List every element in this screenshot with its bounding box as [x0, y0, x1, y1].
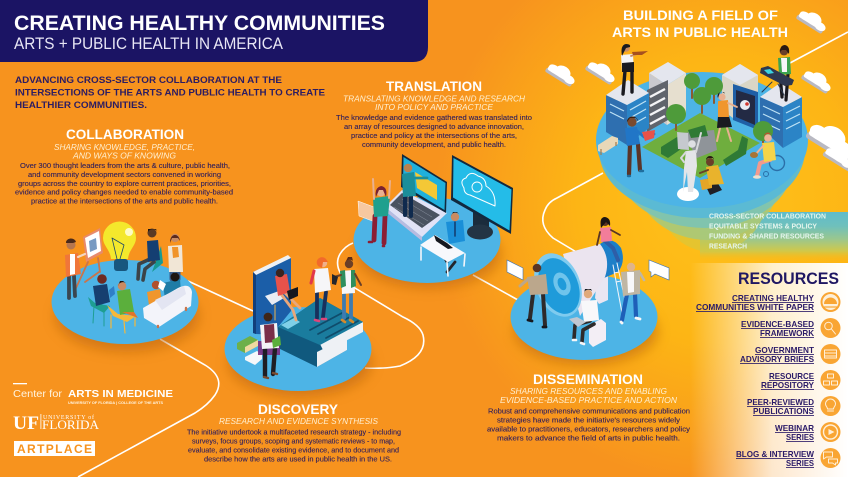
logo: university of florida: FLORIDA — [42, 418, 99, 432]
megaphone — [525, 240, 623, 324]
person: standing woman — [168, 234, 183, 279]
text block: discovery: describe how the arts are used in public health in the US. — [204, 454, 392, 464]
person: seated reader — [265, 269, 300, 320]
text block: dissemination: available to practitioners, educators, researchers and policy — [487, 424, 690, 434]
text block: discovery: surveys, focus groups, scoping and systematic reviews - to map, — [192, 436, 395, 446]
text block: translation: TRANSLATION — [386, 78, 482, 94]
person: standing on laptop — [402, 164, 427, 216]
heading: building a field: ARTS IN PUBLIC HEALTH — [612, 24, 788, 40]
text block: dissemination: DISSEMINATION — [533, 371, 643, 387]
book stacks — [237, 336, 280, 365]
intro statement: HEALTHIER COMMUNITIES. — [15, 100, 147, 111]
text block: discovery: evaluate, and consolidate existing evidence, and to document and — [188, 446, 399, 454]
funnel beneath the field platform — [599, 82, 805, 252]
person: seated group on chairs — [88, 274, 138, 333]
text block: collaboration: evidence and policy changes needed to enable community-based — [15, 188, 233, 196]
background glow — [380, 0, 848, 477]
teal strip behind field pillars — [700, 212, 848, 262]
list: resource links: COMMUNITIES WHITE PAPER — [696, 302, 814, 312]
person: orange hair — [311, 257, 331, 321]
logo: center for arts in medicine: UNIVERSITY OF FLORIDA | COLLEGE OF THE ARTS — [68, 401, 164, 405]
text block: dissemination — [487, 371, 690, 442]
list: resource links: SERIES — [786, 432, 814, 442]
intro statement: INTERSECTIONS OF THE ARTS AND PUBLIC HEALTH TO CREATE — [15, 88, 325, 98]
lawn — [642, 113, 760, 178]
logo: university of florida — [13, 413, 99, 434]
statue — [677, 132, 701, 201]
text block: translation: The knowledge and evidence gathered was translated into — [336, 113, 532, 122]
person: man on right — [621, 263, 644, 323]
list: resource links: EVIDENCE-BASED — [741, 319, 814, 329]
list: resource links: REPOSITORY — [761, 380, 814, 390]
text block: collaboration: practice at the intersections of the arts and public health. — [31, 196, 218, 206]
logo: center for arts in medicine: Center for — [13, 388, 63, 400]
list: resource links: PUBLICATIONS — [753, 406, 814, 416]
logo: university of florida: UF — [13, 413, 39, 434]
icon: webinar play — [820, 422, 840, 442]
monitor — [451, 155, 513, 240]
icon: white paper — [820, 292, 840, 312]
cloud 1 — [545, 59, 579, 88]
logo: artplace: ARTPLACE — [17, 442, 92, 456]
text block: collaboration: COLLABORATION — [66, 126, 184, 142]
horizontal books — [278, 298, 363, 367]
person: woman with book — [625, 116, 655, 176]
text block: dissemination: SHARING RESOURCES AND ENABLING — [510, 387, 667, 396]
person: woman with arms raised — [369, 179, 390, 246]
cloud 2 — [585, 57, 619, 86]
list: field pillars: RESEARCH — [709, 242, 747, 250]
text block: dissemination: strategies have made the initiative's resources widely — [497, 416, 680, 424]
trees — [666, 73, 773, 146]
icon: speech blog — [820, 448, 840, 468]
icon: repository — [820, 370, 840, 390]
list: resource links: PEER-REVIEWED — [747, 397, 814, 407]
text block: discovery: DISCOVERY — [258, 401, 339, 417]
intro statement — [15, 75, 325, 111]
person: seated man — [138, 228, 163, 280]
illustration: translation platform — [354, 154, 513, 288]
heading: building a field: BUILDING A FIELD OF — [623, 7, 778, 23]
desk with seated man — [420, 212, 465, 276]
text block: collaboration: Over 300 thought leaders from the arts & culture, public health, — [20, 161, 230, 170]
list: resource links: GOVERNMENT — [755, 345, 814, 355]
text block: collaboration: groups across the country to explore current practices, priorities, — [18, 179, 231, 188]
person: keyboard player — [760, 45, 794, 100]
resources panel background — [690, 263, 848, 477]
bench — [598, 136, 618, 155]
person: presenter — [65, 238, 85, 298]
list: resource links: RESOURCE — [769, 371, 814, 381]
person: woman at mural — [717, 92, 737, 141]
person: green vest — [332, 257, 361, 322]
person: violinist — [621, 44, 648, 94]
list: resource links: WEBINAR — [775, 423, 814, 433]
text block: translation: community development, and public health. — [362, 140, 506, 149]
cloud 4 — [801, 66, 835, 95]
list: resource links: ADVISORY BRIEFS — [740, 354, 814, 364]
ladder — [613, 263, 625, 313]
heading: resources: RESOURCES — [738, 269, 839, 288]
laptop — [385, 154, 447, 241]
list: field pillars: CROSS-SECTOR COLLABORATION — [709, 212, 826, 220]
text block: dissemination: Robust and comprehensive communications and publication — [488, 406, 690, 416]
cloud 5 — [805, 116, 848, 163]
text block: translation: practice and policy at the intersections of the arts, — [351, 131, 517, 140]
heading: building a field — [612, 7, 788, 40]
list: field pillars: EQUITABLE SYSTEMS & POLICY — [709, 222, 817, 230]
text block: translation: TRANSLATING KNOWLEDGE AND RESEARCH — [343, 94, 525, 104]
clouds — [545, 6, 848, 173]
text block: dissemination: makers to advance the field of arts in public health. — [497, 434, 680, 442]
buildings — [606, 62, 802, 148]
speech bubbles — [507, 260, 669, 280]
text block: discovery: RESEARCH AND EVIDENCE SYNTHESIS — [219, 417, 379, 426]
title banner — [0, 0, 428, 62]
title: CREATING HEALTHY COMMUNITIES — [14, 12, 385, 35]
text block: dissemination: EVIDENCE-BASED PRACTICE AND ACTION — [500, 396, 677, 405]
person: wheelchair user — [750, 132, 784, 179]
text block: collaboration: and community development sectors convened in working — [28, 170, 221, 179]
icon: magnifier — [820, 318, 840, 338]
illustration: collaboration platform — [52, 221, 199, 352]
list: resource links — [696, 293, 814, 468]
person: woman sitting on megaphone — [597, 217, 620, 260]
easel — [76, 228, 103, 288]
text block: discovery — [187, 401, 401, 464]
list: resource links: BLOG & INTERVIEW — [736, 449, 814, 459]
text block: collaboration: AND WAYS OF KNOWING — [72, 152, 176, 160]
logo: center for arts in medicine — [13, 383, 173, 405]
list: field pillars — [709, 212, 826, 250]
list: resource links: FRAMEWORK — [760, 328, 814, 338]
person: man seated on cube — [569, 289, 606, 347]
person: kneeling painter — [700, 156, 724, 195]
text block: collaboration: SHARING KNOWLEDGE, PRACTICE, — [54, 143, 195, 152]
person: man left of megaphone — [520, 264, 548, 327]
text block: translation: INTO POLICY AND PRACTICE — [375, 103, 494, 112]
icon: light bulb publication — [820, 396, 840, 416]
illustration: field platform — [596, 44, 808, 208]
hedges — [661, 125, 748, 166]
logo: center for arts in medicine: ARTS IN MEDICINE — [68, 388, 173, 400]
text block: collaboration — [15, 126, 233, 206]
list: resource links: CREATING HEALTHY — [732, 293, 814, 303]
illustration: dissemination platform — [507, 217, 669, 365]
logo: university of florida: UNIVERSITY of — [43, 414, 94, 421]
list: field pillars: FUNDING & SHARED RESOURCES — [709, 232, 824, 240]
illustration: discovery platform — [224, 255, 372, 397]
subtitle: ARTS + PUBLIC HEALTH IN AMERICA — [14, 34, 284, 53]
icon: light bulb — [103, 221, 136, 271]
intro statement: ADVANCING CROSS-SECTOR COLLABORATION AT THE — [15, 75, 282, 86]
list: resource links: SERIES — [786, 458, 814, 468]
icon: briefs — [820, 344, 840, 364]
floating panel — [358, 201, 375, 222]
text block: translation — [336, 78, 532, 149]
upright book — [253, 255, 291, 335]
sofa with two people — [143, 272, 192, 327]
text block: discovery: The initiative undertook a multifaceted research strategy - including — [187, 428, 401, 436]
cloud 3 — [796, 6, 830, 35]
text block: translation: an array of resources designed to advance innovation, — [344, 122, 524, 131]
cloud 6 — [822, 142, 848, 173]
person: front standing — [260, 313, 281, 378]
